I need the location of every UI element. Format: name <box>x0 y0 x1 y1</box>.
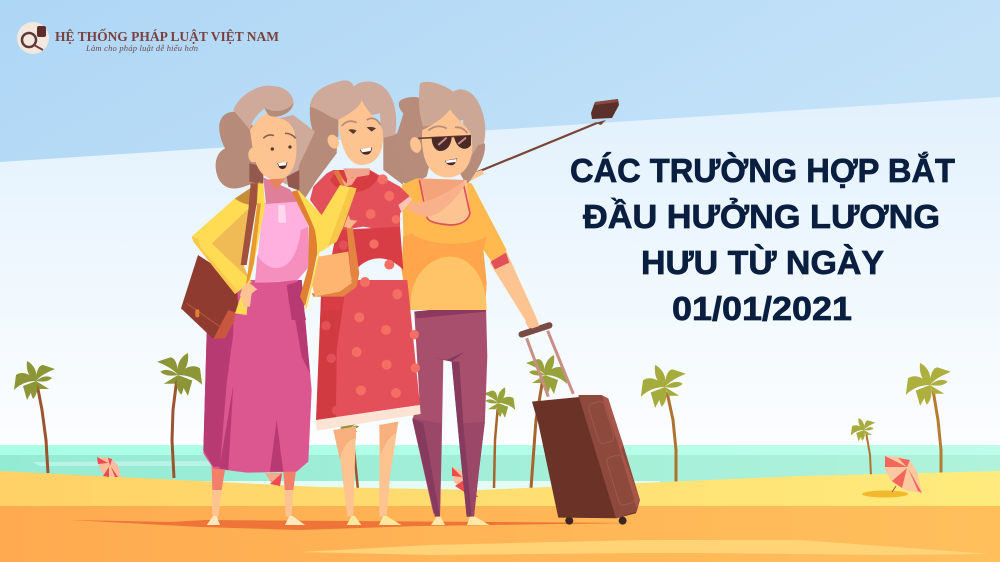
woman middle: legs and skirt <box>316 280 421 525</box>
woman left: jacket, shirt and hands <box>192 177 357 320</box>
logo <box>17 22 279 54</box>
palm tree 4 <box>483 387 515 488</box>
title: HƯU TỪ NGÀY <box>641 244 884 281</box>
beach umbrella behind first woman <box>265 473 282 486</box>
title: 01/01/2021 <box>672 290 852 327</box>
logo name text: HỆ THỐNG PHÁP LUẬT VIỆT NAM <box>55 29 279 44</box>
palm tree 3 behind legs <box>340 418 360 490</box>
palm tree 8 <box>906 363 951 473</box>
selfie stick and phone <box>463 99 619 182</box>
title: ĐẦU HƯỞNG LƯƠNG <box>583 198 940 235</box>
palm tree 6 <box>641 365 686 483</box>
suitcase <box>522 318 640 525</box>
palm tree 5 <box>526 355 567 488</box>
woman right: legs and trousers <box>412 304 489 525</box>
beach umbrella middle <box>452 467 478 497</box>
palm tree 2 <box>157 353 202 478</box>
woman middle: hair, dress top, arm, bag <box>298 80 465 310</box>
beach umbrella left <box>97 457 121 477</box>
woman left: hair and face <box>216 86 315 191</box>
title <box>570 152 955 327</box>
title: CÁC TRƯỜNG HỢP BẮT <box>570 152 955 189</box>
palm tree 7 small <box>851 418 875 476</box>
logo slogan text: Làm cho pháp luật dễ hiểu hơn <box>85 43 198 53</box>
palm tree 1 <box>14 361 55 473</box>
woman left: skirt, legs and bag <box>181 255 312 525</box>
beach umbrella right with shadow <box>862 456 922 498</box>
sea <box>0 445 1000 496</box>
woman right: hair, torso and face <box>391 82 539 333</box>
sand beach <box>0 471 1000 562</box>
